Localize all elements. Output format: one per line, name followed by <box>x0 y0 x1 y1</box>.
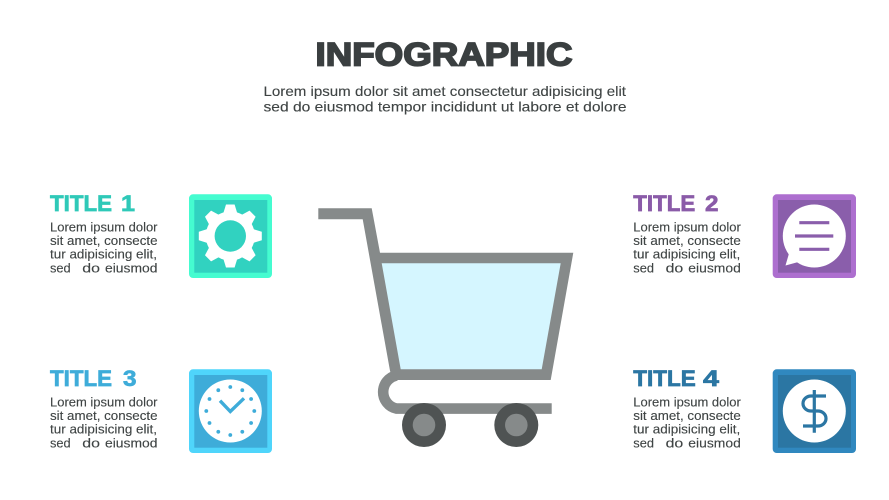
body text 1: do <box>82 261 100 275</box>
body text 1: sit amet, consecte <box>50 234 158 248</box>
body text 2 <box>633 220 741 275</box>
icon: clock <box>189 369 272 453</box>
body text 4: sed <box>633 436 654 450</box>
icon: speech bubble <box>773 194 856 278</box>
body text 4: sit amet, consecte <box>633 409 741 423</box>
body text 1 <box>50 220 158 275</box>
body text 4: do <box>666 436 683 450</box>
body text 2: tur adipisicing elit, <box>633 248 740 262</box>
body text 2: Lorem ipsum dolor <box>633 220 741 234</box>
body text 1: sed <box>50 261 71 275</box>
panel: title 3 <box>50 366 272 453</box>
body text 4: eiusmod <box>688 436 741 450</box>
body text 2: do <box>666 261 683 275</box>
body text 4: Lorem ipsum dolor <box>633 395 741 409</box>
body text 3: Lorem ipsum dolor <box>50 395 158 409</box>
heading: title 2: 2 <box>705 191 718 216</box>
body text 3 <box>50 395 158 450</box>
panel: title 2 <box>633 191 856 278</box>
panel: title 4 <box>633 366 856 453</box>
heading: title 3: 3 <box>123 366 136 391</box>
cart basket fill <box>381 263 561 370</box>
cart frame and handle <box>318 208 573 380</box>
body text 1: tur adipisicing elit, <box>50 248 157 262</box>
subtitle: sed do eiusmod tempor incididunt ut labore et dolore <box>264 98 627 114</box>
body text 3: sit amet, consecte <box>50 409 158 423</box>
subtitle: Lorem ipsum dolor sit amet consectetur adipisicing elit <box>264 83 626 99</box>
title: INFOGRAPHIC <box>316 36 572 72</box>
heading: title 4: TITLE <box>633 366 696 391</box>
heading: title 1: TITLE <box>50 191 112 216</box>
body text 2: eiusmod <box>688 261 741 275</box>
body text 3: sed <box>50 436 71 450</box>
left wheel <box>402 403 446 447</box>
body text 3: tur adipisicing elit, <box>50 423 157 437</box>
heading: title 3: TITLE <box>50 366 112 391</box>
heading: title 4: 4 <box>703 366 720 391</box>
cart lower rail <box>383 375 552 409</box>
body text 1: eiusmod <box>105 261 158 275</box>
heading: title 1: 1 <box>121 191 135 216</box>
body text 2: sit amet, consecte <box>633 234 741 248</box>
shopping cart illustration <box>318 208 573 447</box>
body text 2: sed <box>633 261 654 275</box>
body text 3: eiusmod <box>105 436 158 450</box>
right wheel <box>494 403 538 447</box>
icon: dollar <box>773 369 856 453</box>
body text 3: do <box>82 436 100 450</box>
body text 4: tur adipisicing elit, <box>633 423 740 437</box>
body text 1: Lorem ipsum dolor <box>50 220 158 234</box>
subtitle <box>264 83 627 114</box>
heading: title 2: TITLE <box>633 191 695 216</box>
icon: gear <box>189 194 272 278</box>
body text 4 <box>633 395 741 450</box>
panel: title 1 <box>50 191 272 278</box>
